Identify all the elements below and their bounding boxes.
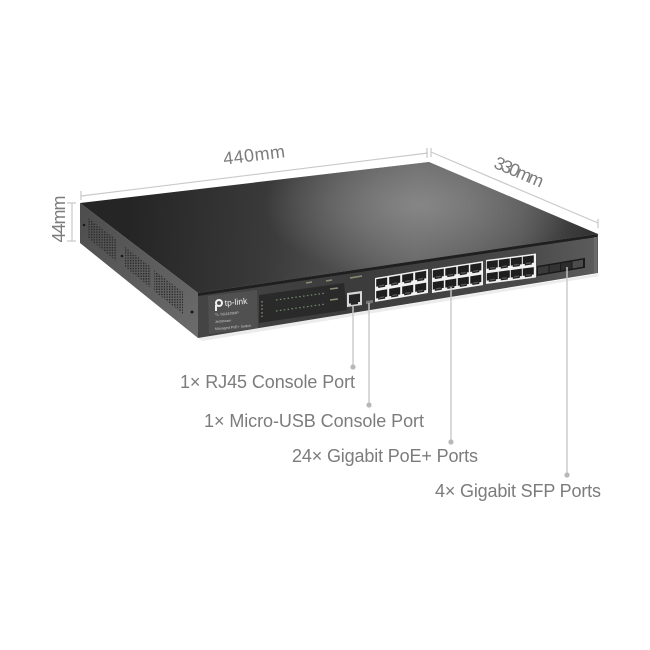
switch device [80,162,600,341]
LED panel [259,276,362,323]
port block 2 [432,261,483,293]
brand name: tp-link [224,296,249,308]
top cover [80,162,598,293]
dimension: depth 330mm: 330mm [491,153,547,191]
SFP ports [537,258,585,276]
shadow [198,274,600,341]
dimension: height 44mm: 44mm [49,196,69,242]
micro-USB console port [366,300,373,304]
callout: RJ45 console port [180,305,356,392]
left side panel with vents [80,203,198,338]
logo icon [216,300,222,306]
port block 1 [375,269,428,302]
dimension: depth 330mm [431,148,598,228]
model number: TL-SG3428MP [215,311,240,317]
callout: PoE+ ports [292,287,478,466]
callout: RJ45 console port: 1× RJ45 Console Port [180,372,355,392]
dimension: width 440mm: 440mm [222,141,286,169]
callout: micro-USB console port [204,303,424,431]
callout: SFP ports: 4× Gigabit SFP Ports [435,481,601,501]
dimension: width 440mm [81,141,428,200]
callout: PoE+ ports: 24× Gigabit PoE+ Ports [292,446,478,466]
front panel [198,234,598,338]
callout: micro-USB console port: 1× Micro-USB Console Port [204,411,424,431]
logo plate [208,290,258,334]
RJ45 console port [347,291,362,307]
port block 3 [486,254,536,284]
callout: SFP ports [435,267,601,501]
product description: Managed PoE+ Switch [215,324,251,331]
product line: JetStream [215,319,231,324]
